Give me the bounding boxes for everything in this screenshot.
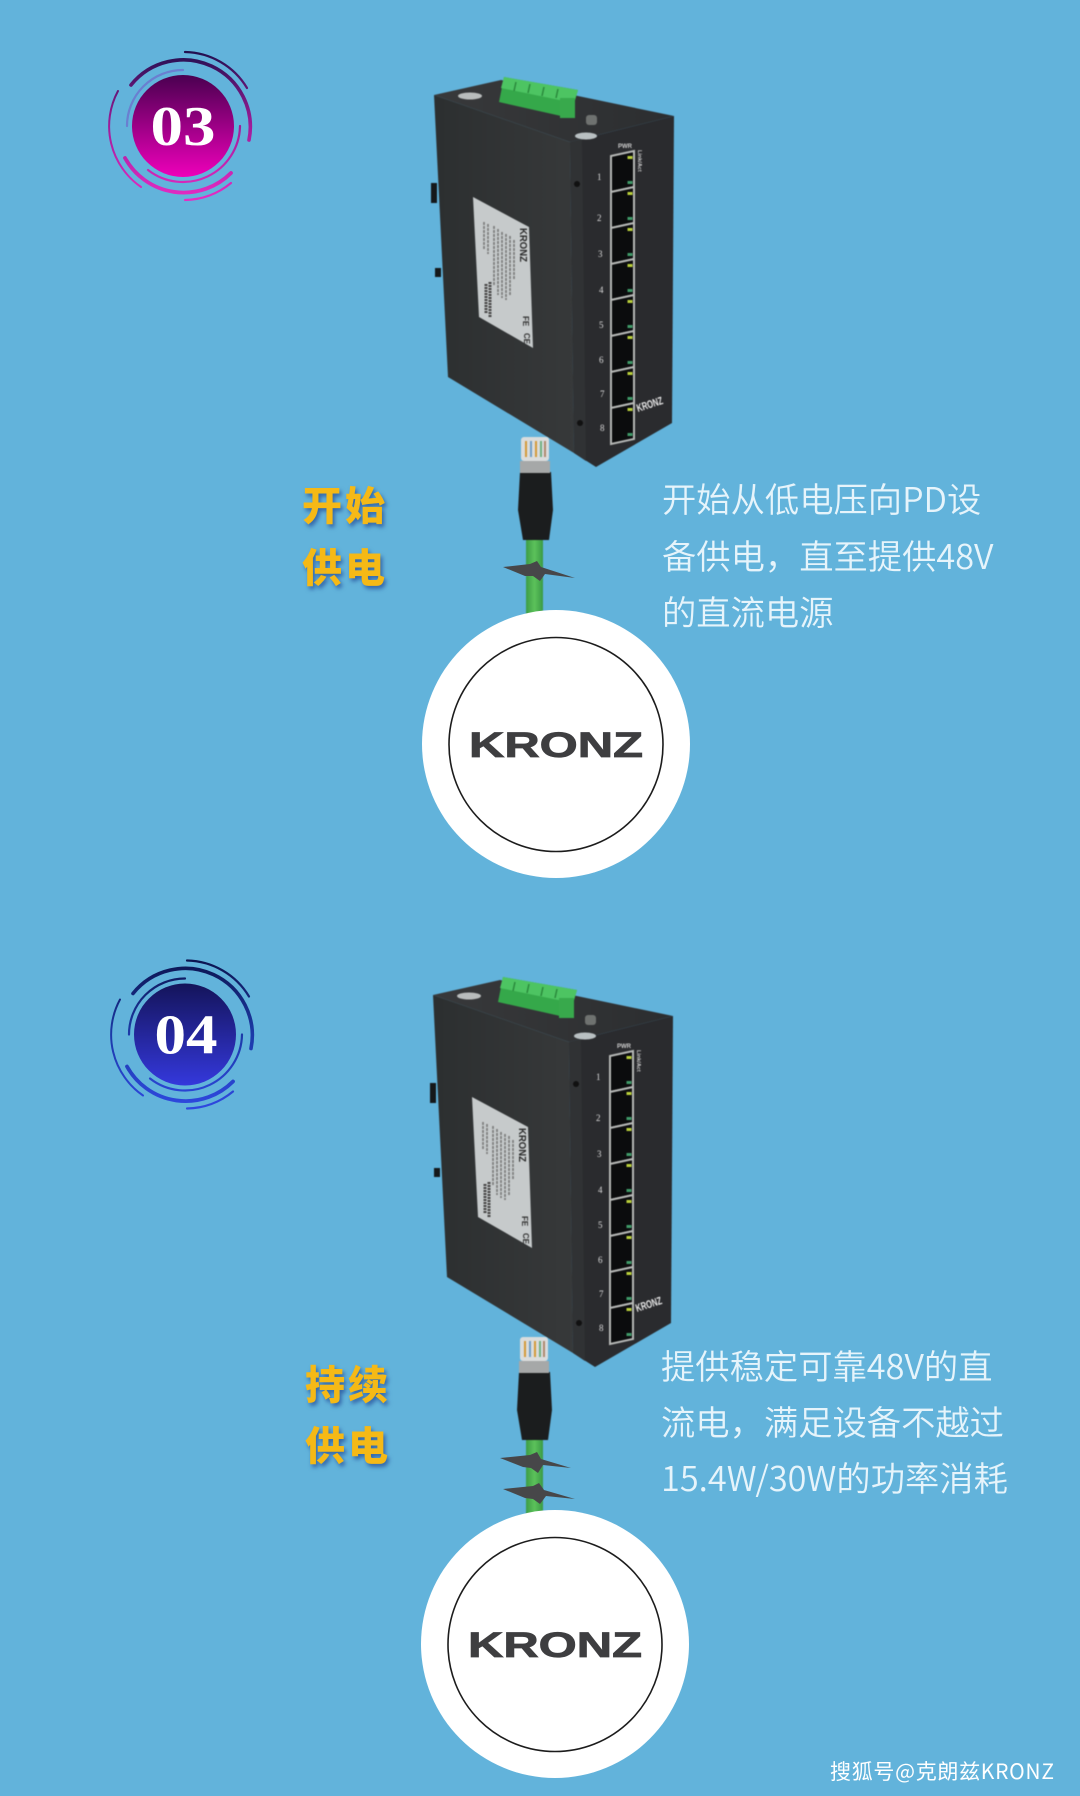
ports 1-8: 5	[598, 1220, 603, 1230]
ports 1-8: PWR	[618, 144, 633, 150]
ports 1-8: 4	[598, 1185, 603, 1195]
ports 1-8: 6	[599, 355, 604, 365]
powered device circle: KRONZ	[469, 726, 643, 765]
ports 1-8: 7	[600, 389, 605, 399]
badge: 04: 04	[154, 1004, 218, 1066]
ports 1-8: 1	[597, 172, 602, 182]
brand on front: KRONZ	[634, 1295, 664, 1315]
icon: lightning bolt	[503, 561, 575, 581]
product label: FE	[521, 316, 530, 327]
product label: CE	[522, 333, 531, 345]
ports 1-8: Link/Act	[635, 1050, 641, 1072]
panel: step 04	[111, 960, 1008, 1778]
ports 1-8: 3	[597, 1149, 602, 1159]
din rail clips	[430, 1083, 440, 1177]
ports 1-8: 6	[598, 1255, 603, 1265]
ports 1-8	[596, 1044, 641, 1344]
product label: FE	[520, 1216, 529, 1227]
ports 1-8: 1	[596, 1072, 600, 1082]
product: PoE switch	[430, 977, 673, 1367]
ports 1-8: Link/Act	[636, 150, 642, 172]
ports 1-8: 5	[599, 320, 604, 330]
description: 15.4W/30W的功率消耗	[661, 1451, 1008, 1501]
ports 1-8: 8	[600, 423, 605, 433]
brand on front: KRONZ	[635, 395, 665, 415]
ports 1-8	[597, 144, 642, 444]
product label: KRONZ	[517, 228, 528, 262]
product label	[473, 197, 533, 348]
badge: 03: 03	[150, 96, 216, 158]
panel: step 03	[109, 52, 994, 878]
powered device circle	[422, 610, 690, 878]
ports 1-8: PWR	[617, 1044, 632, 1050]
description: 开始从低电压向PD设	[662, 472, 981, 522]
icon: lightning bolt lower	[503, 1483, 575, 1504]
icon: lightning bolt upper	[500, 1452, 571, 1473]
description: 的直流电源	[662, 585, 834, 635]
watermark: 搜狐号@克朗兹KRONZ	[830, 1756, 1054, 1786]
cable with connector	[517, 1337, 552, 1514]
product label: CE	[521, 1233, 530, 1245]
label: start power: 供电	[302, 536, 388, 594]
ports 1-8: 2	[597, 213, 602, 223]
label: continuous power: 持续	[305, 1353, 391, 1411]
product label: KRONZ	[516, 1128, 527, 1162]
product label	[472, 1097, 532, 1248]
din rail clips	[431, 183, 441, 277]
badge: 03	[109, 52, 250, 200]
product: PoE switch	[431, 77, 674, 467]
cable with connector	[518, 437, 553, 614]
terminal block	[499, 77, 578, 118]
ports 1-8: 2	[596, 1113, 600, 1123]
ports 1-8: 4	[599, 285, 604, 295]
label: start power: 开始	[302, 474, 388, 532]
powered device circle: KRONZ	[468, 1626, 642, 1665]
description: 提供稳定可靠48V的直	[661, 1339, 993, 1389]
terminal block	[498, 977, 577, 1018]
badge: 04	[111, 960, 252, 1108]
ports 1-8: 3	[598, 249, 603, 259]
description: 备供电，直至提供48V	[662, 529, 994, 579]
ports 1-8: 8	[599, 1323, 604, 1333]
ports 1-8: 7	[599, 1289, 604, 1299]
description: 流电，满足设备不越过	[661, 1395, 1004, 1445]
powered device circle	[421, 1510, 689, 1778]
label: continuous power: 供电	[305, 1414, 391, 1472]
